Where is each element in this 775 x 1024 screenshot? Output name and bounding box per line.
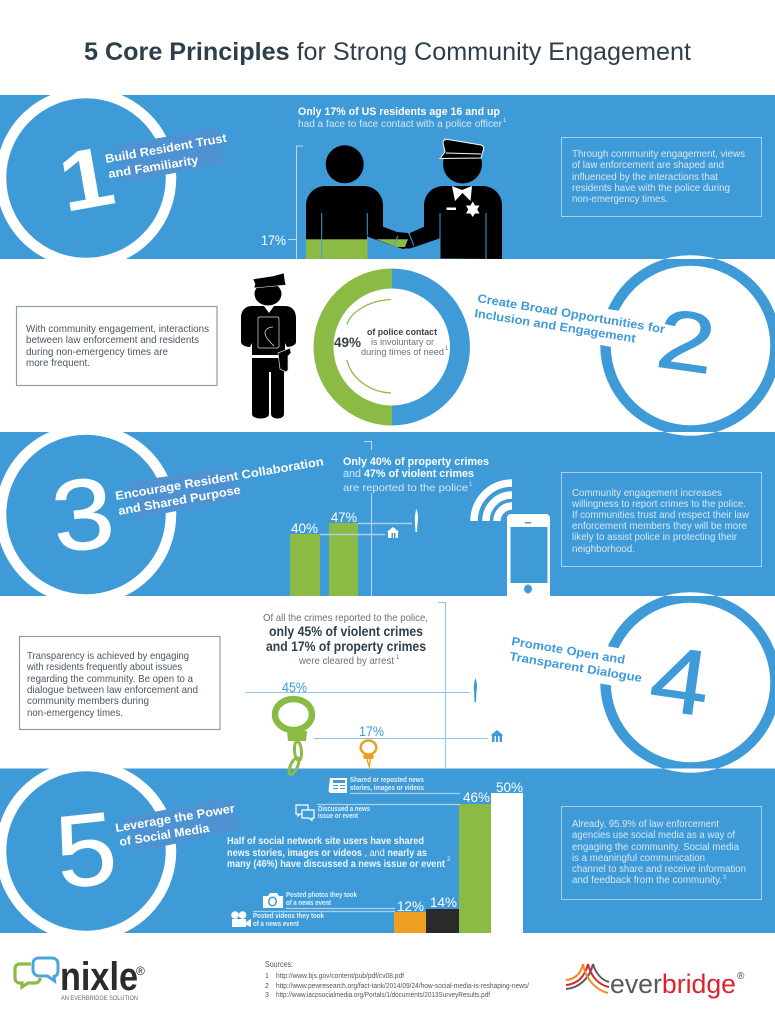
- ring: number 5: [1, 766, 171, 936]
- icon: wifi signal: [474, 483, 512, 521]
- callout: principle 2: more frequent.: [26, 357, 90, 369]
- callout: principle 1: residents have with the police during: [572, 182, 730, 194]
- label: posted videos: [253, 913, 324, 928]
- callout: principle 3: neighborhood.: [572, 543, 635, 555]
- callout: principle 1: of law enforcement are shaped and: [572, 159, 724, 171]
- stat text: social news sharing: news stories, images or videos , and nearly as: [227, 847, 427, 859]
- footer: everbridge logo: everbridge: [610, 969, 736, 999]
- callout: principle 5: agencies use social media as a way of: [572, 829, 735, 841]
- callout: principle 3: [562, 472, 762, 566]
- callout: principle 3: enforcement members they will be more: [572, 520, 747, 532]
- callout: principle 5: 3: [723, 875, 727, 881]
- callout: principle 1: [562, 138, 762, 216]
- stat text: crimes reported: [343, 456, 489, 494]
- callout: principle 2: during non-emergency times are: [26, 346, 168, 358]
- callout: principle 3: willingness to report crimes to the police.: [571, 498, 746, 510]
- icon: house: [490, 730, 504, 742]
- icon: orange handcuff: [361, 740, 376, 770]
- callout: principle 1: non-emergency times.: [572, 193, 668, 205]
- callout: principle 4: non-emergency times.: [27, 707, 123, 719]
- banner: principle 2 heading: [470, 288, 667, 352]
- icon: knife: [474, 678, 477, 702]
- callout: principle 5: is a meaningful communication: [572, 852, 705, 864]
- callout: principle 5: engaging the community. Social media: [572, 841, 739, 853]
- callout: principle 4: dialogue between law enforcement and: [27, 684, 198, 696]
- stat text: crimes reported: and 47% of violent crimes: [343, 468, 474, 480]
- callout: principle 4: community members during: [27, 695, 149, 707]
- ring: number 2: [606, 260, 775, 430]
- stat text: social news sharing: Half of social network site users have shared: [227, 835, 424, 847]
- stat text: social news sharing: 2: [447, 857, 451, 863]
- icon: newspaper: [328, 778, 347, 793]
- panel: principle 1 band: [0, 93, 775, 263]
- numeral 1: 1: [52, 129, 121, 230]
- footer: sources: [265, 959, 529, 999]
- banner: principle 5 heading: of Social Media: [118, 821, 211, 849]
- scale bracket and 17% label: 17%: [261, 232, 286, 248]
- donut chart: 49%: 49%: [334, 334, 362, 350]
- callout: principle 4: Transparency is achieved by engaging: [27, 650, 189, 662]
- footer: sources: 1: [265, 973, 269, 980]
- banner: principle 3 heading: and Shared Purpose: [117, 483, 242, 518]
- donut chart: 49%: is involuntary or: [371, 337, 434, 348]
- icon: camera: [263, 893, 283, 908]
- callout: principle 3: likely to assist police in protecting their: [572, 531, 737, 543]
- callout: principle 1: Through community engagement, views: [572, 148, 745, 160]
- icon: house: [387, 527, 399, 538]
- icon: knife: [415, 509, 418, 532]
- stat text: 17% face to face: [298, 106, 507, 130]
- footer: everbridge logo: ®: [737, 971, 745, 982]
- stat text: cleared by arrest: and 17% of property crimes: [266, 639, 426, 654]
- donut chart: 49%: of police contact: [367, 327, 438, 338]
- stat text: cleared by arrest: were cleared by arrest: [298, 655, 394, 667]
- icon: resident: [306, 145, 414, 259]
- panel: principle 4 section: [20, 598, 775, 776]
- stat text: crimes reported: Only 40% of property crimes: [343, 456, 489, 468]
- banner: principle 4 heading: Transparent Dialogue: [509, 649, 643, 685]
- bar chart: crimes reported: [290, 442, 418, 596]
- label: posted photos: Posted photos they took: [286, 892, 357, 899]
- bar chart: social media activity: 46%: [463, 789, 490, 805]
- callout: principle 4: regarding the community. Be open to a: [27, 673, 193, 685]
- banner: principle 3 heading: [114, 454, 325, 519]
- stat text: 17% face to face: 1: [503, 118, 507, 124]
- stat text: 17% face to face: had a face to face contact with a police officer: [298, 118, 502, 130]
- stat text: cleared by arrest: [263, 612, 428, 667]
- icon: standing police officer: [241, 273, 296, 418]
- banner: principle 4 heading: [505, 628, 643, 690]
- chart: handcuff arrest rates: [246, 602, 504, 776]
- chart: handcuff arrest rates: 45%: [282, 679, 307, 695]
- stat text: crimes reported: are reported to the police: [343, 482, 468, 494]
- banner: principle 1 heading: Build Resident Trust: [104, 131, 228, 166]
- callout: principle 3: Community engagement increases: [572, 487, 722, 499]
- footer: sources: http://www.iacpsocialmedia.org/Portals/1/documents/2013SurveyResults.pdf: [276, 992, 490, 999]
- scale bracket and 17% label: [261, 146, 303, 259]
- footer: nixle logo: [15, 955, 145, 1002]
- stat text: cleared by arrest: Of all the crimes reported to the police,: [263, 612, 428, 624]
- donut chart: 49%: 1: [445, 346, 449, 352]
- donut chart: 49%: during times of need: [361, 347, 444, 358]
- footer: sources: 2: [265, 983, 269, 990]
- callout: principle 5: channel to share and receive information: [572, 863, 746, 875]
- callout: principle 1: influenced by the interactions that: [572, 171, 718, 183]
- icon: police officer shaking hands: [405, 139, 502, 259]
- icon: chat bubbles: [296, 805, 314, 820]
- banner: principle 2 heading: Create Broad Opportunities for: [477, 291, 667, 336]
- banner: principle 1 heading: and Familiarity: [107, 153, 200, 181]
- ring: number 1: [1, 93, 171, 263]
- label: shared or reposted: [350, 777, 424, 792]
- banner: principle 3 heading: Encourage Resident Collaboration: [114, 454, 325, 503]
- callout: principle 4: [20, 636, 220, 730]
- footer: sources: http://www.pewresearch.org/fact-tank/2014/09/24/how-social-media-is-reshaping-news/: [276, 983, 529, 990]
- stat text: cleared by arrest: only 45% of violent crimes: [269, 624, 423, 639]
- banner: principle 1 heading: [104, 128, 228, 183]
- ring: number 3: [1, 430, 171, 600]
- chart: handcuff arrest rates: 17%: [359, 723, 384, 739]
- stat text: 17% face to face: Only 17% of US residents age 16 and up: [298, 106, 500, 118]
- panel: principle 3 band: [0, 430, 775, 604]
- callout: principle 2: between law enforcement and residents: [26, 334, 199, 346]
- title: 5 Core Principles for Strong Community Engagement: [84, 38, 691, 66]
- panel: principle 2 section: [16, 260, 775, 430]
- label: posted videos: Posted videos they took: [253, 913, 324, 920]
- stat text: social news sharing: [227, 835, 451, 870]
- label: shared or reposted: stories, images or videos: [350, 785, 424, 792]
- callout: principle 2: [16, 306, 217, 386]
- banner: principle 4 heading: Promote Open and: [511, 634, 626, 667]
- stat text: cleared by arrest: 1: [396, 655, 400, 661]
- footer: nixle logo: nixle: [60, 955, 138, 999]
- label: shared or reposted: Shared or reposted news: [350, 777, 424, 784]
- panel: principle 5 band: [0, 766, 775, 936]
- label: posted videos: of a news event: [253, 921, 300, 928]
- callout: principle 2: With community engagement, interactions: [26, 323, 209, 335]
- callout: principle 4: with residents frequently about issues: [26, 661, 182, 673]
- callout: principle 5: and feedback from the community.: [572, 874, 722, 886]
- banner: principle 2 heading: Inclusion and Engagement: [474, 306, 637, 345]
- bar chart: social media activity: 14%: [430, 894, 457, 910]
- footer: sources: http://www.bjs.gov/content/pub/pdf/cv08.pdf: [276, 973, 404, 980]
- numeral 4: 4: [644, 626, 716, 736]
- icon: video camera: [231, 911, 251, 927]
- footer: sources: 3: [265, 992, 269, 999]
- numeral 2: 2: [652, 291, 721, 392]
- bar chart: social media activity: 12%: [397, 898, 424, 914]
- stat text: social news sharing: many (46%) have discussed a news issue or event: [227, 858, 445, 870]
- numeral 3: 3: [47, 457, 119, 574]
- callout: principle 5: Already, 95.9% of law enforcement: [572, 818, 719, 830]
- bar chart: crimes reported: 40%: [291, 520, 318, 536]
- footer: everbridge logo: [566, 964, 745, 999]
- callout: principle 5: [562, 806, 762, 900]
- stat text: crimes reported: 1: [469, 482, 473, 488]
- callout: principle 3: If communities trust and respect their law: [572, 509, 749, 521]
- banner: principle 5 heading: [114, 797, 240, 852]
- numeral 5: 5: [50, 791, 122, 910]
- bar chart: social media activity: 50%: [496, 779, 523, 795]
- bar chart: social media activity: [253, 779, 523, 933]
- label: discussed a news issue: issue or event: [318, 813, 359, 820]
- footer: nixle logo: ®: [136, 964, 145, 978]
- icon: smartphone: [507, 514, 550, 604]
- footer: sources: Sources:: [265, 959, 293, 969]
- donut chart: 49%: [324, 278, 460, 416]
- label: posted photos: of a news event: [286, 900, 332, 907]
- label: discussed a news issue: Discussed a news: [318, 806, 370, 813]
- icon: green handcuff: [275, 699, 312, 776]
- ring: number 4: [606, 598, 775, 768]
- banner: principle 5 heading: Leverage the Power: [114, 801, 236, 835]
- label: posted photos: [286, 892, 357, 907]
- label: discussed a news issue: [318, 806, 370, 820]
- bar chart: crimes reported: 47%: [331, 509, 357, 525]
- footer: nixle logo: AN EVERBRIDGE SOLUTION: [61, 995, 138, 1002]
